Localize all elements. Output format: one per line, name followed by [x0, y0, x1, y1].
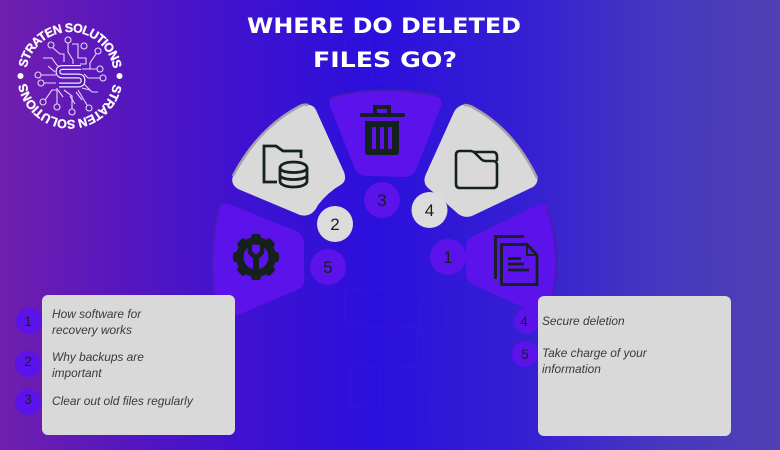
segment: tools — [212, 204, 304, 322]
icon: gear and wrench — [233, 234, 279, 280]
number badge 1: 1 — [443, 248, 453, 267]
text: secure deletion: Secure deletion — [542, 314, 625, 328]
segment: folder — [424, 104, 537, 217]
list marker 3 — [15, 389, 41, 415]
text: take charge of your information: information — [542, 362, 601, 376]
list marker 1 — [16, 308, 42, 334]
number badge 5: 5 — [323, 258, 333, 277]
segment: document — [466, 204, 557, 318]
list marker 4: 4 — [520, 314, 528, 329]
title: FILES GO? — [313, 48, 457, 73]
list marker 5: 5 — [521, 347, 529, 362]
list marker 4 — [514, 308, 540, 334]
number badge 4 — [412, 192, 448, 228]
title — [247, 14, 521, 73]
logo: Straten Solutions — [18, 23, 122, 129]
list marker 3: 3 — [24, 392, 32, 407]
icon: trash can — [360, 105, 405, 155]
number badge 3: 3 — [377, 191, 387, 210]
logo: Straten Solutions: STRATEN SOLUTIONS — [18, 84, 122, 129]
list marker 5 — [512, 341, 538, 367]
number badge 2: 2 — [330, 215, 340, 234]
title: WHERE DO DELETED — [247, 14, 521, 39]
number badge 1 — [430, 239, 466, 275]
icon: folder and database — [264, 146, 307, 187]
text: how software for recovery works: How software for — [52, 307, 141, 321]
logo: Straten Solutions: STRATEN SOLUTIONS — [18, 23, 122, 68]
number badge 3 — [364, 182, 400, 218]
panel: right list — [538, 296, 731, 436]
number badge 4: 4 — [425, 201, 434, 220]
number badge 2 — [317, 206, 353, 242]
segment: folder with database — [232, 104, 345, 216]
icon: documents — [496, 236, 537, 284]
segment: trash — [329, 90, 442, 177]
text: clear out old files regularly: Clear out old files regularly — [52, 394, 193, 408]
text: how software for recovery works: recovery works — [52, 323, 132, 337]
number badge 5 — [310, 249, 346, 285]
list marker 2 — [15, 351, 41, 377]
list marker 1: 1 — [24, 314, 32, 329]
panel: left list — [42, 295, 235, 435]
text: take charge of your information — [542, 346, 648, 376]
icon: folder — [456, 151, 497, 188]
text: take charge of your information: Take charge of your — [542, 346, 647, 360]
text: why backups are important: important — [52, 366, 102, 380]
list marker 2: 2 — [24, 354, 32, 369]
text: why backups are important: Why backups are — [52, 350, 144, 364]
text: why backups are important — [52, 350, 144, 380]
text: how software for recovery works — [52, 307, 142, 337]
